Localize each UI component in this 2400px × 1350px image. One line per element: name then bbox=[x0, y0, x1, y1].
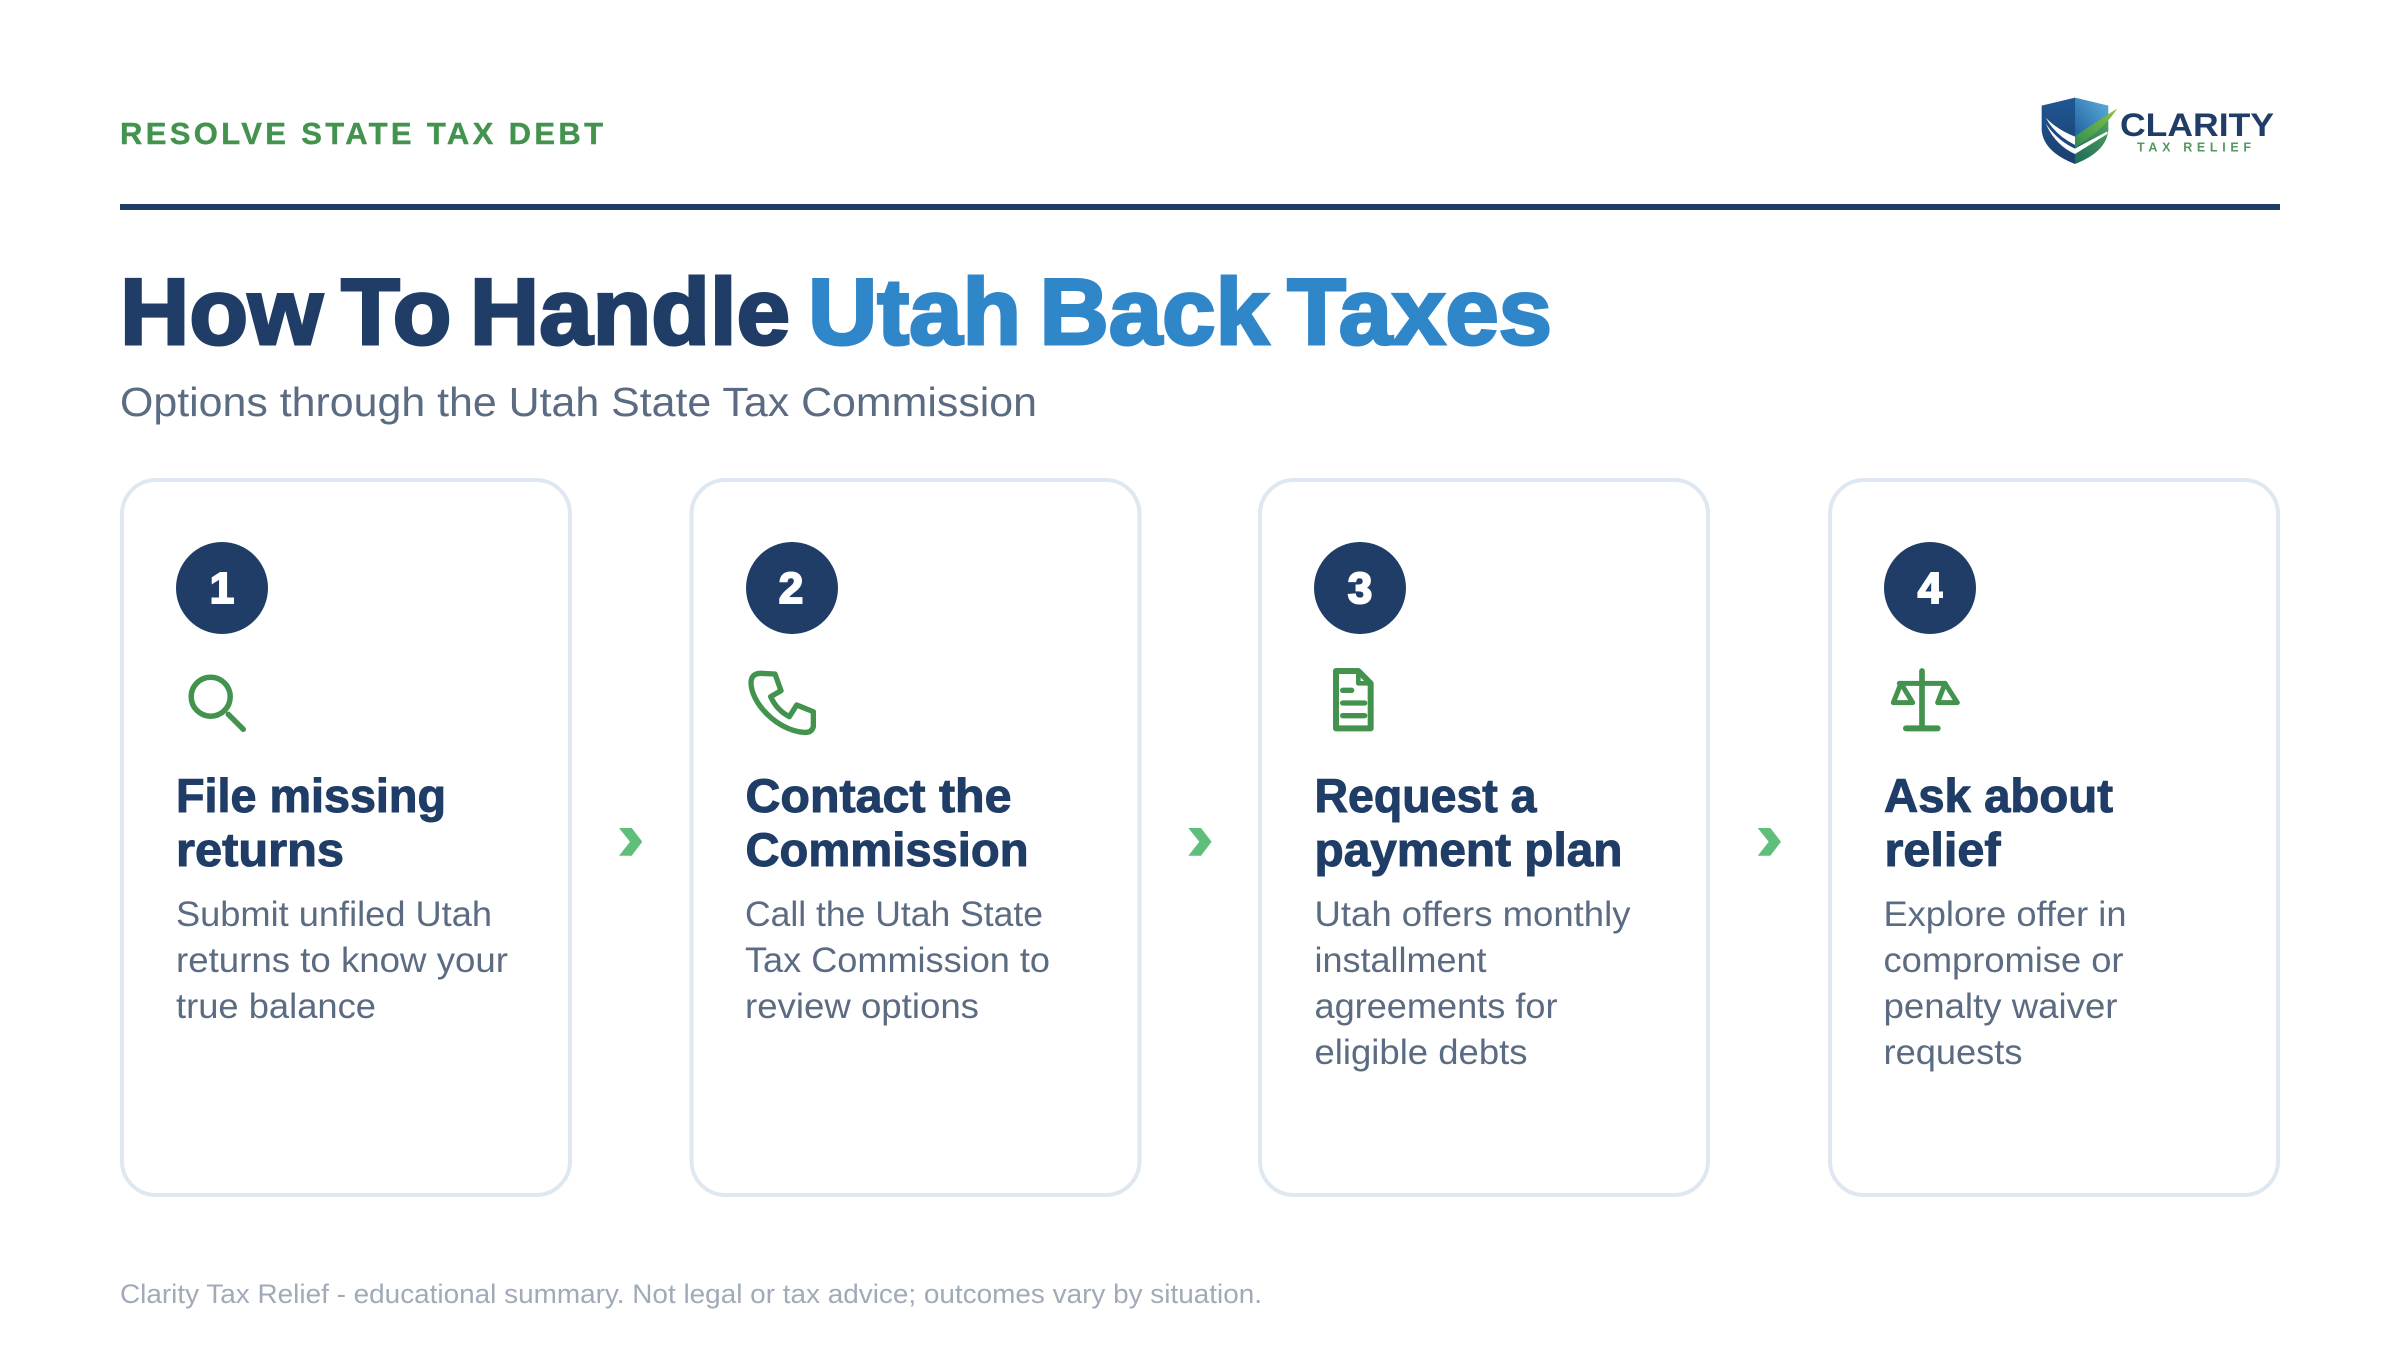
title bbox=[120, 259, 1552, 364]
step 1 description bbox=[176, 895, 508, 1026]
step 4 description: penalty waiver bbox=[1884, 987, 2118, 1026]
step 1 description: Submit unfiled Utah bbox=[176, 895, 492, 934]
icon: phone bbox=[751, 673, 813, 732]
step 2 description: Call the Utah State bbox=[745, 895, 1043, 934]
card outline bbox=[1260, 480, 1708, 1195]
step 1 heading bbox=[176, 769, 446, 876]
step 1 heading: File missing bbox=[176, 769, 446, 822]
step 2 description bbox=[745, 895, 1050, 1026]
arrow 3 bbox=[1758, 828, 1781, 856]
step 2 description: review options bbox=[745, 987, 979, 1026]
step 3 heading: Request a bbox=[1314, 769, 1537, 822]
step number 1 bbox=[176, 542, 268, 634]
step 4 description: requests bbox=[1884, 1033, 2022, 1072]
step 3 description bbox=[1314, 895, 1631, 1072]
step 4 description bbox=[1884, 895, 2126, 1072]
panel: step 3 request a payment plan bbox=[1260, 480, 1708, 1195]
step number 4: 4 bbox=[1918, 564, 1943, 613]
card outline bbox=[1830, 480, 2278, 1195]
card outline bbox=[122, 480, 570, 1195]
title: How To Handle bbox=[120, 259, 790, 364]
step number 3 bbox=[1314, 542, 1406, 634]
step 4 description: Explore offer in bbox=[1884, 895, 2126, 934]
step number 4 bbox=[1884, 542, 1976, 634]
step number 2 bbox=[746, 542, 838, 634]
step 3 description: installment bbox=[1314, 941, 1487, 980]
step 3 heading bbox=[1314, 769, 1622, 876]
panel: step 1 file missing returns bbox=[122, 480, 570, 1195]
icon: balance scale bbox=[1893, 671, 1957, 728]
header rule bbox=[120, 204, 2280, 210]
footer disclaimer: Clarity Tax Relief - educational summary. Not legal or tax advice; outcomes vary by situation. bbox=[120, 1279, 1262, 1309]
logo shield bbox=[2042, 98, 2117, 164]
step 4 heading bbox=[1884, 769, 2113, 876]
step 1 description: true balance bbox=[176, 987, 376, 1026]
eyebrow heading: RESOLVE STATE TAX DEBT bbox=[120, 116, 603, 151]
icon: magnifying glass bbox=[191, 677, 243, 729]
step 3 heading: payment plan bbox=[1314, 823, 1622, 876]
step 2 heading: Contact the bbox=[746, 769, 1012, 822]
step 1 heading: returns bbox=[176, 823, 344, 876]
step 1 description: returns to know your bbox=[176, 941, 508, 980]
step 2 description: Tax Commission to bbox=[745, 941, 1050, 980]
logo wordmark: CLARITY bbox=[2120, 107, 2274, 143]
logo: Clarity Tax Relief bbox=[2042, 98, 2274, 164]
step 3 description: agreements for bbox=[1314, 987, 1558, 1026]
step 3 description: Utah offers monthly bbox=[1314, 895, 1631, 934]
step 4 heading: Ask about bbox=[1884, 769, 2113, 822]
panel: step 2 contact the commission bbox=[692, 480, 1140, 1195]
panel: step 4 ask about relief bbox=[1830, 480, 2278, 1195]
step 2 heading: Commission bbox=[746, 823, 1028, 876]
step number 1: 1 bbox=[210, 564, 234, 613]
arrow 2 bbox=[1188, 828, 1212, 856]
arrow 1 bbox=[619, 828, 642, 856]
step 4 description: compromise or bbox=[1884, 941, 2124, 980]
step 3 description: eligible debts bbox=[1314, 1033, 1528, 1072]
title: Utah Back Taxes bbox=[808, 259, 1552, 364]
step number 2: 2 bbox=[779, 564, 803, 613]
icon: document bbox=[1336, 671, 1371, 728]
step 2 heading bbox=[746, 769, 1028, 876]
logo tagline: TAX RELIEF bbox=[2137, 141, 2251, 155]
card outline bbox=[692, 480, 1140, 1195]
step 4 heading: relief bbox=[1884, 823, 2001, 876]
subtitle: Options through the Utah State Tax Commission bbox=[120, 379, 1037, 425]
step number 3: 3 bbox=[1348, 564, 1372, 613]
